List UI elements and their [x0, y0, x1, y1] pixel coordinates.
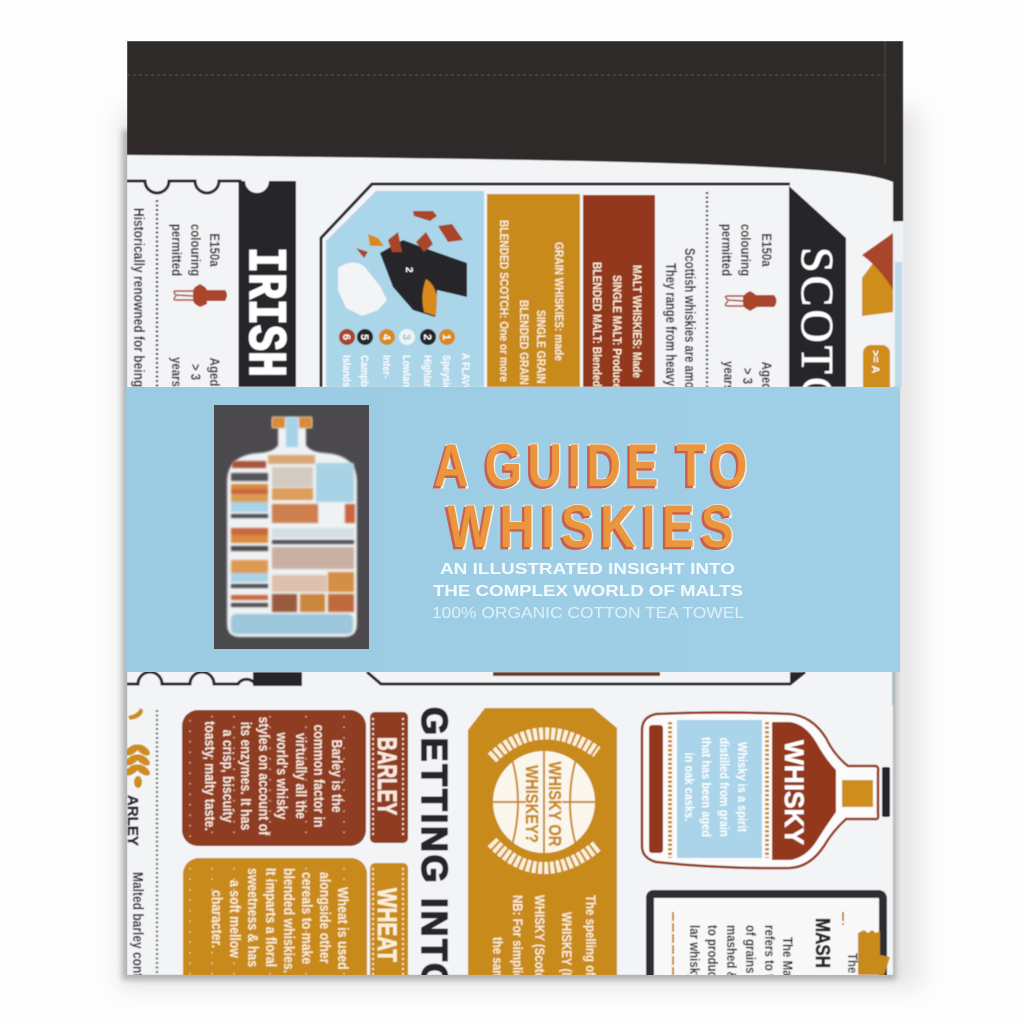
E150a colouring note: years — [169, 357, 185, 387]
map legend numbers — [339, 329, 455, 345]
map legend labels: A FLAVOUR — [459, 353, 471, 407]
right folded edge — [893, 222, 903, 387]
panel: grain whiskies — [487, 194, 580, 387]
panel: mash bill: The — [845, 953, 861, 973]
badge: ball with words: WHISKY OR — [545, 762, 564, 847]
Scotch description: Scottish whiskies are among — [682, 248, 699, 402]
panel: mash bill: MASH — [812, 918, 834, 968]
subtitle — [433, 561, 743, 600]
panel: mash bill: of grains — [743, 925, 759, 973]
lower ticket edge (Irish) — [127, 672, 302, 686]
panel: wheat description: Wheat is used — [335, 887, 351, 970]
map legend numbers: 4 — [380, 334, 392, 341]
panel: Irish whiskey ticket — [127, 181, 296, 387]
title: A Guide to: A GUIDE TO — [434, 433, 753, 500]
E150a colouring note: E150a — [759, 233, 775, 267]
E150a colouring note: colouring — [188, 224, 204, 276]
panel: barley description: world's whisky — [274, 732, 290, 820]
title: A Guide to: A GUIDE TO — [432, 434, 751, 501]
icon: wreath bottom — [492, 842, 597, 868]
lower ticket edge (map and Scotch) — [367, 672, 805, 684]
spelling text: The spelling of — [583, 895, 599, 977]
illustration: whisky bottle: distilled from grain — [717, 737, 732, 837]
Scotch description: They range from heavy — [663, 263, 680, 387]
panel: mash bill: The Mash — [780, 937, 796, 990]
panel: malt whiskies: BLENDED MALT: Blended — [590, 262, 603, 387]
panel: grain whiskies: SINGLE GRAIN — [534, 310, 547, 384]
icon: wheat ear — [127, 708, 150, 788]
map legend numbers: 2 — [421, 334, 433, 340]
map legend labels: Campbeltown — [358, 355, 370, 416]
panel: grain whiskies: GRAIN WHISKIES: made — [552, 242, 565, 361]
panel: wheat description: alongside other — [317, 872, 333, 964]
panel: wheat tag — [370, 863, 408, 993]
mini bottle — [227, 417, 357, 637]
panel: malt whiskies — [583, 195, 655, 396]
E150a colouring note: years — [721, 361, 737, 391]
map legend labels — [342, 352, 470, 387]
panel: mash bill: to produce — [705, 925, 721, 984]
illustration: whisky bottle: that has been aged — [699, 737, 714, 837]
panel: barley description: virtually all the — [293, 733, 309, 819]
panel: barley description: a crisp, biscuity — [220, 730, 236, 823]
panel: mash bill: refers to the — [762, 925, 778, 991]
right edge graphics: badge and pill — [862, 233, 893, 395]
E150a colouring note: permitted — [169, 224, 185, 276]
panel: malt whiskies: SINGLE MALT: Produced — [610, 275, 623, 396]
grain column: barley label: Malted barley contains — [130, 872, 146, 1001]
icon: dropper — [726, 291, 776, 311]
Irish description: Historically renowned for being — [131, 208, 147, 387]
panel: whisky or whiskey — [468, 708, 617, 1000]
dark folded flap — [127, 41, 903, 221]
E150a colouring note: permitted — [719, 224, 735, 276]
bottle label — [677, 720, 762, 858]
panel: grain whiskies: BLENDED SCOTCH: One or more — [497, 220, 510, 382]
subtitle: AN ILLUSTRATED INSIGHT INTO — [440, 561, 735, 578]
Scotch title: SCOTCH — [792, 247, 843, 444]
panel: barley tag: BARLEY — [372, 737, 402, 815]
bottle neck — [842, 780, 873, 807]
E150a colouring note: Aged — [759, 362, 775, 390]
spelling text: the same — [490, 937, 506, 987]
towel — [123, 41, 903, 1001]
grain column: barley label: ARLEY — [124, 795, 141, 846]
icon: wreath top — [492, 733, 597, 758]
mini bottle contents — [231, 417, 355, 634]
title: Whiskies: WHISKIES — [445, 495, 738, 562]
white towel body — [127, 155, 893, 975]
map: central orange region — [422, 279, 437, 316]
spelling text: WHISKEY (Irish — [559, 912, 575, 997]
right edge graphics: badge and pill: >= A — [869, 350, 881, 373]
map: Scotland mainland — [380, 240, 467, 317]
map legend numbers: 5 — [358, 334, 370, 340]
panel: barley description — [182, 710, 366, 846]
E150a colouring note: > 3 — [188, 364, 204, 380]
map: Ireland in white — [338, 262, 387, 316]
paper band — [126, 387, 900, 672]
panel: wheat description: blended whiskies. — [281, 868, 297, 973]
spelling text: NB: For simplicity — [510, 895, 526, 994]
map legend numbers: 6 — [340, 334, 352, 340]
product photo: folded whisky tea towel with paper band — [116, 41, 924, 992]
illustration: whisky bottle — [642, 712, 890, 868]
bottle shoulder — [772, 722, 836, 860]
map legend labels: Islands — [340, 355, 352, 387]
Irish title: IRISH — [233, 247, 294, 377]
band mini poster — [214, 405, 369, 649]
right edge line — [892, 672, 894, 705]
panel: wheat description — [182, 857, 368, 975]
panel: mash bill — [650, 894, 890, 1000]
E150a colouring note: colouring — [738, 224, 754, 276]
spelling text: WHISKY (Scotch — [532, 895, 548, 986]
Scotch title bar — [789, 186, 846, 387]
panel: Scotland map — [321, 184, 484, 416]
panel: barley description: common factor in — [311, 724, 327, 828]
Scotch description — [662, 248, 696, 387]
subtitle: THE COMPLEX WORLD OF MALTS — [433, 583, 743, 600]
map legend labels: Highlands — [421, 355, 433, 400]
panel: barley description: Barley is the — [329, 739, 345, 813]
panel: malt whiskies: MALT WHISKIES: Made — [630, 265, 643, 378]
bottle cap — [882, 767, 890, 817]
E150a colouring note — [719, 224, 775, 391]
panel: mash bill: mashed & — [724, 925, 740, 980]
panel: barley description: toasty, malty taste. — [202, 721, 218, 831]
E150a colouring note: Aged — [207, 358, 223, 386]
spelling text — [490, 895, 599, 997]
panel: wheat description: a soft mellow — [227, 880, 243, 958]
panel: wheat description: sweetness & has — [245, 868, 261, 967]
map legend labels: Lowlands — [400, 355, 412, 398]
panel: barley description: styles on account of — [256, 717, 272, 836]
badge: ball with words: WHISKEY? — [522, 765, 541, 843]
E150a colouring note: E150a — [207, 233, 223, 267]
map legend labels: Speyside — [440, 355, 452, 396]
Irish title bar — [240, 181, 296, 387]
panel: Scotland map: 2 — [403, 267, 414, 273]
towel shadow — [120, 110, 920, 988]
icon: dropper — [174, 284, 227, 307]
panel: wheat tag: WHEAT — [372, 888, 402, 962]
badge: ball with words — [493, 751, 595, 853]
map legend numbers: 1 — [440, 334, 452, 340]
grain column: barley label — [127, 708, 159, 975]
map legend numbers: 3 — [400, 334, 412, 340]
bottle base band — [649, 725, 663, 853]
orange ribbon corner — [858, 930, 890, 975]
panel: mash bill: lar whisky — [687, 925, 703, 981]
panel: Scotch ticket — [483, 182, 847, 387]
title: A Guide to: A GUIDE TO — [434, 432, 753, 499]
panel: wheat description: character. — [209, 890, 225, 948]
illustration: whisky bottle: Whisky is a spirit — [735, 742, 750, 832]
panel: wheat description: It imparts a floral — [263, 868, 279, 967]
map: islands — [356, 211, 463, 258]
bottle outline — [642, 712, 878, 868]
E150a colouring note: > 3 — [740, 368, 756, 384]
illustration: whisky bottle: WHISKY — [779, 740, 809, 845]
title: Whiskies: WHISKIES — [447, 493, 740, 560]
product descriptor: 100% ORGANIC COTTON TEA TOWEL — [432, 605, 744, 622]
panel: barley tag — [370, 712, 408, 843]
panel: barley description: its enzymes. It has — [238, 722, 254, 831]
illustration: whisky bottle: in oak casks. — [682, 753, 697, 821]
panel: grain whiskies: BLENDED GRAIN — [517, 300, 530, 385]
title: Whiskies: WHISKIES — [447, 494, 740, 561]
heading: Getting into: GETTING INTO — [414, 707, 455, 991]
E150a colouring note — [169, 224, 223, 387]
panel: wheat description: cereals to make — [299, 872, 315, 965]
map legend labels: Inter- — [380, 355, 392, 378]
